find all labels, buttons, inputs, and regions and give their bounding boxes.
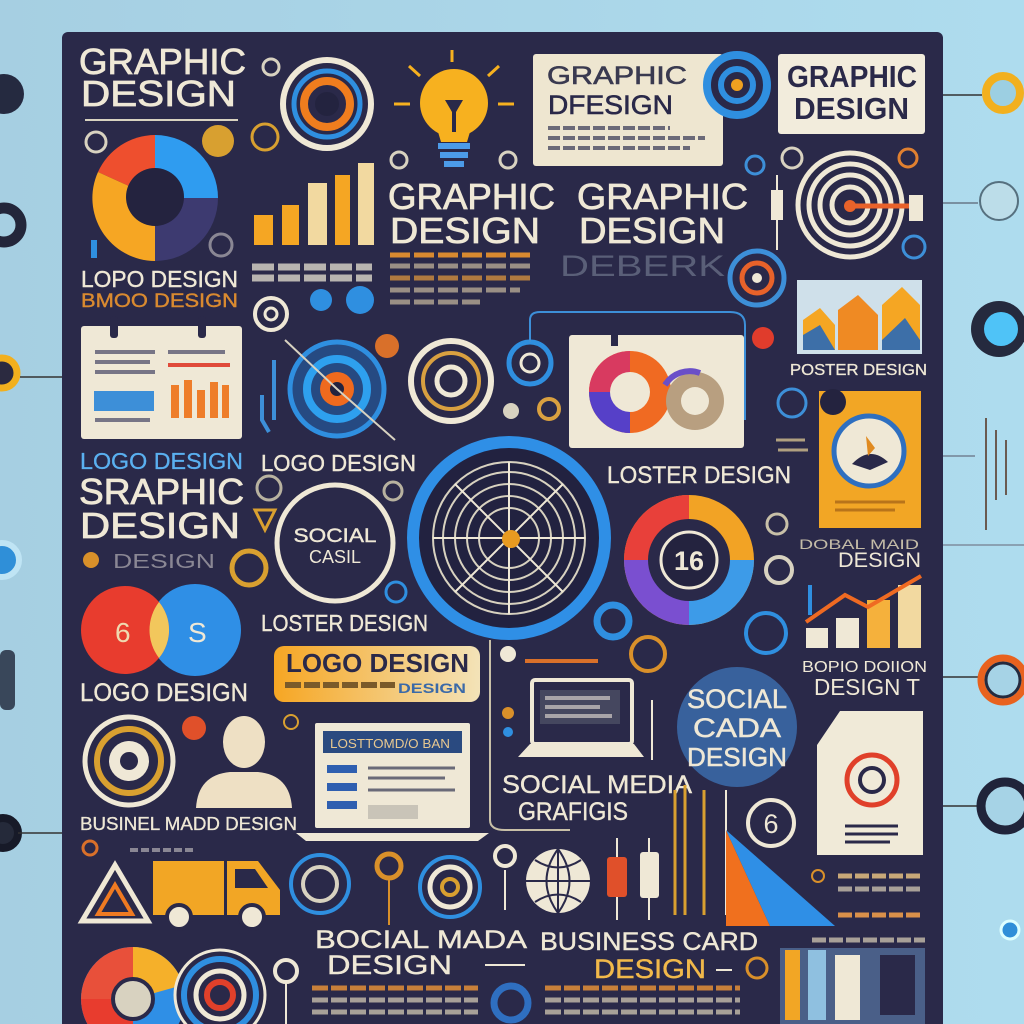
card: graphic design right: GRAPHIC xyxy=(787,59,917,94)
chart card center xyxy=(569,322,744,448)
heading: center right graphic design: GRAPHIC xyxy=(577,176,748,217)
venn diagram: S xyxy=(188,617,207,648)
growth chart right xyxy=(806,576,921,648)
label: logo design center: LOGO DESIGN xyxy=(261,450,416,476)
left edge props xyxy=(0,74,62,848)
label: social design right xyxy=(799,536,921,572)
heading: sraphic design: SRAPHIC xyxy=(79,471,244,512)
small icons row top xyxy=(85,59,917,258)
label: logo design: LOPO DESIGN xyxy=(81,266,238,292)
small icons right mid xyxy=(767,389,846,534)
heading: center right graphic design: DESIGN xyxy=(579,210,725,251)
small icons around badge xyxy=(255,476,406,602)
social media badge: SOCIAL xyxy=(687,684,787,714)
dim design label: DESIGN xyxy=(113,551,215,573)
label: social media graphics: GRAFIGIS xyxy=(518,798,628,826)
caption lines bottom xyxy=(312,988,740,1012)
heading: sraphic design xyxy=(79,471,244,546)
light bulb icon xyxy=(394,50,514,167)
social media badge xyxy=(677,667,797,787)
label: social design right: DESIGN xyxy=(838,549,921,572)
target blue center left xyxy=(255,298,395,440)
globe icon xyxy=(495,846,590,913)
heading: graphic design top left: GRAPHIC xyxy=(79,41,246,82)
target mid bottom xyxy=(291,854,480,925)
candle pins xyxy=(607,838,659,920)
label: loster design: LOSTER DESIGN xyxy=(607,462,791,489)
target icon top xyxy=(283,60,371,148)
social media badge: DESIGN xyxy=(687,742,787,772)
social media badge: CADA xyxy=(693,713,781,743)
social badge: CASIL xyxy=(309,547,361,567)
label: business: BUSINEL MADD DESIGN xyxy=(80,814,297,834)
label: social media graphics xyxy=(502,771,692,826)
social badge xyxy=(277,485,393,601)
multicolor donut xyxy=(624,495,754,625)
central radar xyxy=(413,442,605,634)
label: loster design lower: LOSTER DESIGN xyxy=(261,610,428,636)
heading: center graphic design xyxy=(388,176,555,251)
right edge props xyxy=(943,76,1024,939)
vertical bars and badge xyxy=(675,785,794,915)
orbit icon xyxy=(730,251,784,349)
card: graphic design xyxy=(533,54,723,166)
poster strip bottom right xyxy=(780,948,925,1024)
heading: center right graphic design xyxy=(577,176,748,251)
heading: center graphic design: DESIGN xyxy=(390,210,540,251)
label: poster design: POSTER DESIGN xyxy=(790,362,927,379)
vertical bars and badge: 6 xyxy=(763,809,779,839)
dim design label xyxy=(83,551,266,585)
bullseye top right xyxy=(771,153,925,258)
heading: graphic design top left xyxy=(79,41,246,114)
card: graphic design right: DESIGN xyxy=(794,91,909,126)
bar chart top xyxy=(252,163,374,278)
heading: business card design: DESIGN xyxy=(594,954,706,984)
social badge: SOCIAL xyxy=(294,526,376,547)
heading: bocial mada design xyxy=(315,926,527,980)
banner: logo design: LOGO DESIGN xyxy=(286,648,469,678)
caption right bottom xyxy=(812,870,925,940)
laptop icon xyxy=(490,640,652,830)
small badges xyxy=(310,286,745,420)
heading: graphic design top left: DESIGN xyxy=(81,73,236,114)
heading: business card design xyxy=(540,928,767,984)
card: graphic design right xyxy=(778,54,925,134)
donut chart left xyxy=(92,135,218,261)
small right icons xyxy=(597,557,810,671)
label: social media graphics: SOCIAL MEDIA xyxy=(502,771,692,799)
banner: logo design xyxy=(274,646,480,702)
target lower left xyxy=(85,716,206,805)
triangle logo xyxy=(82,841,195,921)
venn diagram: 6 xyxy=(115,617,131,648)
heading: sraphic design: DESIGN xyxy=(80,505,240,546)
card: graphic design: GRAPHIC xyxy=(547,62,687,90)
label: design right: BOPIO DOIION xyxy=(802,659,927,676)
multicolor donut: 16 xyxy=(674,546,704,576)
banner: logo design: DESIGN xyxy=(398,680,466,696)
label: orange subhead: BMOO DESIGN xyxy=(81,291,238,312)
blue target badge xyxy=(707,55,767,115)
browser mockup xyxy=(296,723,489,841)
document icon xyxy=(817,711,923,855)
label: logo design below venn: LOGO DESIGN xyxy=(80,679,248,707)
card: graphic design: DFESIGN xyxy=(548,90,673,120)
caption text lines center xyxy=(390,255,534,302)
geometric triangles xyxy=(726,830,835,926)
calendar card xyxy=(81,316,242,439)
poster icon cards xyxy=(797,280,922,354)
browser mockup: LOSTTOMD/O BAN xyxy=(330,736,450,751)
target center cream xyxy=(411,341,491,421)
label: social design right: DOBAL MAID xyxy=(799,536,919,552)
target bottom left xyxy=(175,950,297,1024)
truck icon xyxy=(153,861,280,929)
heading: center graphic design: GRAPHIC xyxy=(388,176,555,217)
heading: business card design: BUSINESS CARD xyxy=(540,928,758,956)
person icon xyxy=(196,715,298,808)
donut bottom left xyxy=(81,947,185,1024)
label: design right xyxy=(802,659,927,700)
venn diagram xyxy=(81,584,241,676)
label: design right: DESIGN T xyxy=(814,674,920,700)
dim label: DEBERK xyxy=(560,250,725,283)
heading: bocial mada design: BOCIAL MADA xyxy=(315,926,527,954)
label: logo design left: LOGO DESIGN xyxy=(80,448,243,474)
blue swirl bottom xyxy=(485,965,528,1020)
heading: bocial mada design: DESIGN xyxy=(327,950,452,980)
poster card orange xyxy=(819,391,921,528)
